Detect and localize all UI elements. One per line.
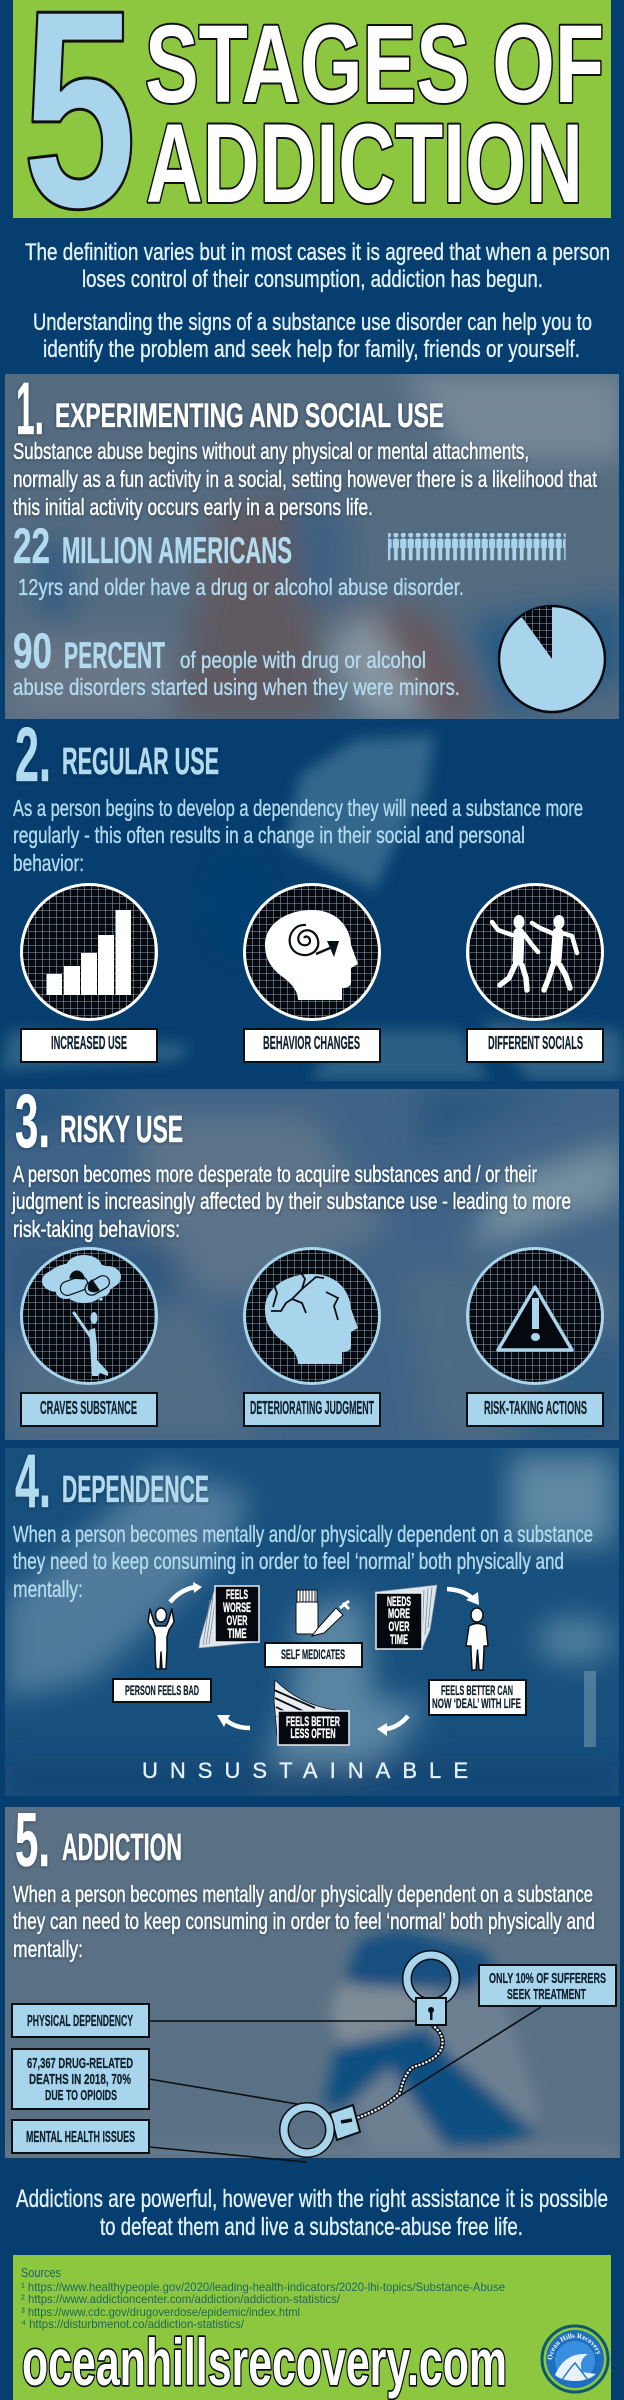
label: self medicates xyxy=(265,1643,362,1667)
label: only 10 percent seek treatment xyxy=(479,1965,616,2006)
photo background: smoke and silhouette xyxy=(0,719,624,1081)
heading: DEPENDENCE xyxy=(62,1469,209,1511)
label: feels better can now deal with life xyxy=(429,1680,526,1715)
heading: 5. xyxy=(15,1798,50,1883)
card: feels worse over time xyxy=(199,1586,259,1648)
label: self medicates: SELF MEDICATES xyxy=(281,1646,345,1662)
card: feels better less often: LESS OFTEN xyxy=(290,1725,336,1741)
card: feels better less often xyxy=(274,1680,349,1745)
stat: 22 million americans xyxy=(13,518,292,574)
stat: 90 percent xyxy=(13,623,460,700)
icon: calm person xyxy=(466,1608,488,1670)
heading xyxy=(15,712,219,798)
icon: handcuffs with chain xyxy=(284,1955,455,2153)
label: physical dependency xyxy=(12,2004,149,2037)
body text: behavior: xyxy=(13,850,84,876)
body text xyxy=(13,438,597,520)
card: feels worse over time: TIME xyxy=(228,1625,246,1641)
icon row: people xyxy=(388,533,566,561)
label: craves substance: CRAVES SUBSTANCE xyxy=(40,1398,137,1418)
heading xyxy=(15,1798,182,1883)
body text: risk-taking behaviors: xyxy=(13,1216,180,1242)
label: mental health issues xyxy=(12,2120,149,2153)
label: increased use xyxy=(21,1029,157,1062)
sources list: ¹ https://www.healthypeople.gov/2020/leading-health-indicators/2020-lhi-topics/Substance-Abuse xyxy=(21,2280,505,2294)
body text xyxy=(13,1881,595,1962)
label: risk-taking actions xyxy=(467,1393,603,1426)
sources list: ³ https://www.cdc.gov/drugoverdose/epidemic/index.html xyxy=(21,2305,300,2319)
stat: 90 percent: abuse disorders started using when they were minors. xyxy=(13,674,460,700)
heading: 2. xyxy=(15,712,51,798)
photo background: clinking bottles xyxy=(5,374,624,719)
label: person feels bad xyxy=(113,1679,211,1702)
icon: craving figure with pill cloud xyxy=(22,1248,156,1384)
body text: this initial activity occurs early in a persons life. xyxy=(13,494,373,520)
label: different socials xyxy=(467,1029,603,1062)
card: feels worse over time: WORSE xyxy=(223,1599,251,1615)
body text: mentally: xyxy=(13,1576,83,1602)
leader lines xyxy=(149,2007,541,2162)
card: needs more over time: MORE xyxy=(388,1605,410,1621)
title banner xyxy=(13,0,611,267)
label: deteriorating judgment xyxy=(244,1393,380,1426)
photo background: syringe and hand xyxy=(5,1089,624,1440)
heading xyxy=(15,1079,183,1164)
logo: ocean hills recovery xyxy=(540,2324,610,2394)
body text xyxy=(13,1521,593,1602)
intro text xyxy=(25,239,610,363)
icon: pill bottle and syringe xyxy=(296,1590,349,1636)
label: mental health issues: MENTAL HEALTH ISSUES xyxy=(26,2129,135,2146)
arrow: to feels worse xyxy=(170,1582,202,1602)
stat: 22 million americans: 22 xyxy=(13,518,50,574)
caption: unsustainable: UNSUSTAINABLE xyxy=(142,1758,468,1783)
sources list: ⁴ https://disturbmenot.co/addiction-statistics/ xyxy=(21,2317,245,2331)
label: behavior changes xyxy=(244,1029,380,1062)
panel: stage 2 regular use xyxy=(0,712,624,1081)
card: needs more over time: TIME xyxy=(390,1631,408,1647)
label: physical dependency: PHYSICAL DEPENDENCY xyxy=(27,2013,133,2030)
icon: cracked head xyxy=(244,1248,380,1384)
body text xyxy=(11,1161,571,1242)
label: drug-related deaths: DEATHS IN 2018, 70% xyxy=(29,2071,131,2088)
pie chart: 90 percent xyxy=(499,606,605,712)
heading: 1. xyxy=(16,367,44,450)
heading: RISKY USE xyxy=(60,1109,183,1151)
arrow: to person feeling better xyxy=(447,1589,479,1605)
footer panel xyxy=(13,2255,611,2400)
icon: distressed person xyxy=(148,1608,174,1669)
heading: ADDICTION xyxy=(62,1827,182,1869)
stat: 90 percent: PERCENT xyxy=(64,635,165,676)
label: craves substance xyxy=(21,1393,157,1426)
label: drug-related deaths: DUE TO OPIOIDS xyxy=(45,2087,117,2104)
panel: stage 1 experimenting xyxy=(5,367,624,719)
stat caption: 12yrs and older have a drug or alcohol abuse disorder. xyxy=(18,574,464,600)
icon: warning triangle xyxy=(468,1248,602,1384)
sources list xyxy=(21,2265,505,2331)
stat: 22 million americans: MILLION AMERICANS xyxy=(62,530,292,571)
icon: increased use bar chart xyxy=(22,884,156,1020)
label: increased use: INCREASED USE xyxy=(51,1033,127,1053)
panel: stage 5 addiction xyxy=(5,1798,620,2162)
photo background: hands, cuffs and paraphernalia xyxy=(5,1448,619,1796)
label: drug-related deaths: 67,367 DRUG-RELATED xyxy=(27,2055,133,2072)
sources list: ² https://www.addictioncenter.com/addiction/addiction-statistics/ xyxy=(21,2292,341,2306)
closing text xyxy=(16,2185,608,2241)
body text xyxy=(13,795,583,876)
card: needs more over time: NEEDS xyxy=(387,1593,411,1609)
label: person feels bad: PERSON FEELS BAD xyxy=(125,1682,199,1698)
diagram: dependence cycle xyxy=(113,1582,526,1745)
sources list: Sources xyxy=(21,2265,61,2280)
logo: ocean hills recovery: Ocean Hills Recovery xyxy=(548,2333,600,2360)
stat: 90 percent: of people with drug or alcohol xyxy=(180,647,426,673)
label: feels better can now deal with life: FEELS BETTER CAN xyxy=(441,1682,513,1698)
heading xyxy=(15,1439,209,1524)
panel: stage 4 dependence xyxy=(5,1439,619,1796)
label: feels better can now deal with life: NOW ‘DEAL’ WITH LIFE xyxy=(432,1695,521,1711)
card: feels worse over time: OVER xyxy=(226,1612,248,1628)
heading xyxy=(16,367,444,450)
stat: 90 percent: 90 xyxy=(13,623,52,679)
card: needs more over time xyxy=(375,1585,437,1649)
label: drug-related deaths xyxy=(12,2049,149,2109)
label: behavior changes: BEHAVIOR CHANGES xyxy=(263,1033,360,1053)
photo background: seated figure xyxy=(5,1807,620,2158)
arrow: to person feels bad xyxy=(217,1715,250,1728)
heading: REGULAR USE xyxy=(62,741,219,783)
card: feels worse over time: FEELS xyxy=(226,1586,248,1602)
icon: head with spiral, behavior changes xyxy=(244,884,380,1020)
panel: stage 3 risky use xyxy=(5,1079,624,1440)
heading: EXPERIMENTING AND SOCIAL USE xyxy=(55,397,444,435)
card: feels better less often: FEELS BETTER xyxy=(286,1713,340,1729)
heading: 4. xyxy=(15,1439,51,1524)
heading: 3. xyxy=(15,1079,50,1164)
card: needs more over time: OVER xyxy=(388,1618,410,1634)
label: deteriorating judgment: DETERIORATING JUDGMENT xyxy=(250,1398,374,1418)
arrow: to feels better less often xyxy=(377,1716,408,1736)
body text: mentally: xyxy=(13,1936,83,1962)
icon: dancing figures, different socials xyxy=(468,884,602,1020)
